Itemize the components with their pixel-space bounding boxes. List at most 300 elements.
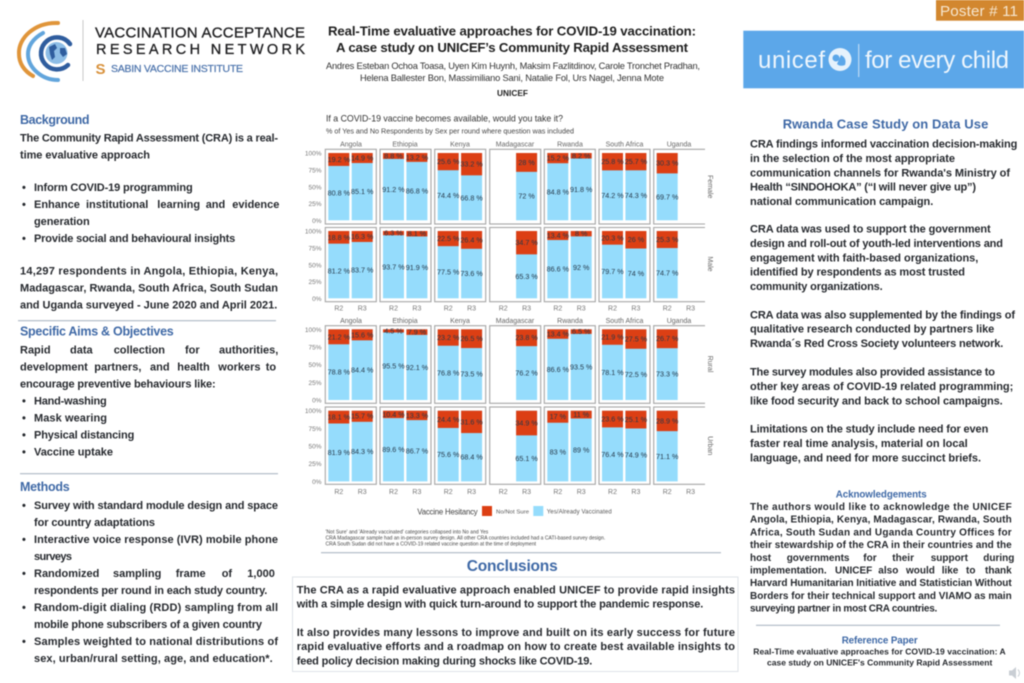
strip label: Rural: Rural bbox=[706, 356, 713, 373]
y axis labels: 0% bbox=[312, 218, 322, 225]
text block: reference citation: Real-Time evaluative approaches for COVID-19 vaccination: A bbox=[753, 647, 1006, 657]
panel: Angola Female bbox=[325, 149, 376, 224]
panel: conclusions bbox=[292, 577, 738, 672]
panel: Uganda Male: 25.3 % bbox=[656, 235, 679, 244]
unicef banner: for every child bbox=[865, 47, 1009, 74]
panel: Kenya Rural: 76.8 % bbox=[437, 368, 460, 377]
panel: Kenya Male: 73.6 % bbox=[460, 269, 483, 278]
list: background bullets bbox=[22, 182, 279, 245]
country strip labels: Kenya bbox=[450, 142, 470, 148]
panel: Uganda Female bbox=[654, 149, 705, 224]
list: background bullets: • bbox=[22, 199, 26, 211]
text block: findings paragraphs: in the selection of the most appropriate bbox=[750, 153, 955, 165]
list: background bullets: and bbox=[206, 199, 225, 211]
panel: Madagascar Male: 34.7 % bbox=[515, 238, 538, 247]
x axis labels: upper chart: R3 bbox=[522, 306, 531, 312]
list: aims bullets: • bbox=[22, 413, 26, 425]
panel: Ethiopia Male bbox=[380, 228, 431, 302]
text block: acknowledgements: thank bbox=[985, 566, 1012, 576]
y axis labels: 50% bbox=[308, 262, 322, 270]
text block: aims intro: authorities, bbox=[219, 345, 278, 357]
panel: conclusions: rapid evaluative efforts and a roadmap on how to create best available insights to bbox=[297, 641, 735, 653]
text block: acknowledgements: Borders for their technical support and VIAMO as main bbox=[750, 591, 1012, 602]
text block: findings paragraphs: qualitative research conducted by partners like bbox=[750, 324, 994, 336]
chart title: If a COVID-19 vaccine becomes available, would you take it? bbox=[326, 114, 563, 124]
y axis labels: 25% bbox=[308, 201, 322, 208]
text block: acknowledgements: would bbox=[905, 566, 935, 576]
text block: aims intro: encourage preventive behaviours like: bbox=[20, 379, 216, 391]
legend: No/Not Sure bbox=[496, 510, 530, 516]
panel: South Africa Male bbox=[599, 228, 650, 302]
logo: Sabin Vaccine Institute: SABIN VACCINE INSTITUTE bbox=[111, 63, 243, 75]
list: background bullets: institutional bbox=[86, 199, 148, 211]
panel: Angola Urban: 18.1 % bbox=[328, 413, 351, 422]
panel: Kenya Female: 74.4 % bbox=[437, 191, 460, 200]
logo wordmark bbox=[95, 24, 305, 58]
y axis labels: 100% bbox=[305, 327, 322, 334]
text block: acknowledgements: also bbox=[878, 566, 898, 576]
logo: Vaccination Acceptance Research Network bbox=[19, 20, 305, 81]
title: Real-Time evaluative approaches for COVID-19 vaccination: bbox=[328, 24, 696, 38]
x axis labels: lower chart: R2 bbox=[608, 489, 617, 496]
list: aims bullets: Mask wearing bbox=[34, 413, 107, 425]
chart subtitle: % of Yes and No Respondents by Sex per round where question was included bbox=[326, 126, 574, 135]
x axis labels: lower chart: R3 bbox=[412, 489, 421, 496]
x axis labels: upper chart: R3 bbox=[358, 306, 367, 312]
panel: Ethiopia Rural: 92.1 % bbox=[406, 363, 429, 372]
panel: Angola Rural: 21.2 % bbox=[328, 332, 351, 341]
y axis labels: 25% bbox=[308, 279, 322, 286]
text block: acknowledgements: host bbox=[750, 553, 772, 564]
logo: Sabin Vaccine Institute: S bbox=[96, 61, 106, 78]
panel: Madagascar Female: 28 % bbox=[518, 158, 535, 167]
chart footnotes: CRA Madagascar sample had an in-person survey design. All other CRA countries included had a CATI-based survey design. bbox=[326, 535, 605, 541]
panel: Angola Male: 16.3 % bbox=[351, 232, 374, 241]
panel: Kenya Urban: 75.6 % bbox=[437, 450, 460, 459]
panel: Ethiopia Male: 8.1 % bbox=[408, 229, 427, 238]
x axis labels: upper chart: R2 bbox=[663, 306, 672, 312]
list: aims bullets: Vaccine uptake bbox=[34, 447, 113, 459]
panel: South Africa Female: 25.8 % bbox=[601, 157, 624, 166]
list: methods bullets: for country adaptations bbox=[34, 517, 155, 529]
x axis labels: upper chart: R3 bbox=[412, 306, 421, 312]
x axis labels: lower chart: R3 bbox=[467, 489, 476, 496]
panel: Rwanda Urban bbox=[544, 407, 595, 484]
y axis labels: 50% bbox=[308, 362, 322, 369]
text block: findings paragraphs: Limitations on the study include need for even bbox=[750, 424, 989, 436]
panel: Ethiopia Female: 8.8 % bbox=[384, 152, 403, 160]
panel: Angola Male bbox=[325, 228, 376, 302]
title: A case study on UNICEF’s Community Rapid Assessment bbox=[336, 40, 689, 55]
panel: Rwanda Male bbox=[544, 228, 595, 302]
x axis labels: upper chart: R2 bbox=[444, 306, 453, 312]
heading: Specific Aims & Objectives: Specific Aims & Objectives bbox=[20, 325, 174, 339]
text block: findings paragraphs: CRA findings informed vaccination decision-making bbox=[750, 139, 1017, 151]
panel: South Africa Rural: 78.1 % bbox=[601, 368, 624, 377]
list: methods bullets: Interactive voice response (IVR) mobile phone bbox=[34, 534, 278, 546]
panel: Kenya Female: 33.2 % bbox=[460, 160, 483, 169]
chart footnotes bbox=[326, 529, 605, 547]
panel: Uganda Urban: 28.9 % bbox=[656, 416, 679, 425]
authors: Andres Esteban Ochoa Toasa, Uyen Kim Huynh, Maksim Fazlitdinov, Carole Tronchet Pradhan, bbox=[326, 61, 700, 71]
panel: Ethiopia Rural: 4.5 % bbox=[384, 326, 403, 335]
text block: acknowledgements: Africa, South Sudan and Uganda Country Offices for bbox=[750, 527, 1012, 538]
panel: Angola Male: 83.7 % bbox=[351, 266, 374, 275]
panel: Madagascar Male: 65.3 % bbox=[515, 272, 538, 281]
x axis labels: lower chart: R2 bbox=[499, 489, 508, 496]
panel: Angola Urban: 84.3 % bbox=[351, 447, 374, 456]
panel: Rwanda Urban: 83 % bbox=[550, 448, 567, 457]
authors: Helena Ballester Bon, Massimiliano Sani, Natalie Fol, Urs Nagel, Jenna Mote bbox=[360, 73, 664, 83]
x axis labels: upper chart bbox=[334, 306, 695, 312]
panel: Kenya Female: 66.8 % bbox=[460, 193, 483, 202]
x axis labels: lower chart: R2 bbox=[553, 489, 562, 496]
text block: aims intro: to bbox=[266, 362, 276, 374]
text block: respondents: and Uganda surveyed - June 2020 and April 2021. bbox=[20, 299, 277, 311]
text block: acknowledgements: Harvard Humanitarian Initiative and Statistician Without bbox=[750, 578, 1012, 589]
panel: Ethiopia Urban: 89.6 % bbox=[382, 445, 405, 454]
panel: South Africa Female bbox=[599, 149, 650, 224]
panel: Uganda Male: 74.7 % bbox=[656, 269, 679, 278]
text block: findings paragraphs: faster real time analysis, material on local bbox=[750, 438, 968, 450]
panel: South Africa Female: 25.7 % bbox=[625, 157, 648, 166]
panel: Uganda Male bbox=[654, 228, 705, 302]
panel: Kenya Male bbox=[435, 228, 486, 302]
icon: concentric arcs and globe bbox=[19, 23, 70, 80]
x axis labels: upper chart: R3 bbox=[686, 306, 695, 312]
panel: South Africa Rural bbox=[599, 326, 650, 403]
x axis labels: lower chart: R3 bbox=[522, 489, 531, 496]
list: background bullets: Inform COVID-19 programming bbox=[34, 182, 193, 194]
panel: South Africa Urban: 76.4 % bbox=[601, 450, 624, 459]
panel: Rwanda case study bbox=[750, 116, 1017, 464]
panel: Uganda Female: 30.3 % bbox=[656, 159, 679, 168]
list: methods bullets: Survey with standard module design and space bbox=[34, 500, 278, 512]
list: background bullets: Provide social and behavioural insights bbox=[34, 233, 235, 245]
list: background bullets: generation bbox=[34, 216, 90, 228]
y axis labels: 25% bbox=[308, 461, 322, 468]
panel: Rwanda Male: 86.6 % bbox=[547, 265, 570, 274]
panel: Angola Female: 85.1 % bbox=[351, 187, 374, 196]
panel: Ethiopia Female bbox=[380, 149, 431, 224]
panel: Ethiopia Male: 93.7 % bbox=[382, 262, 405, 271]
x axis labels: lower chart bbox=[334, 489, 695, 496]
heading: Conclusions: Conclusions bbox=[467, 558, 558, 575]
panel: Rwanda Male: 92 % bbox=[573, 263, 590, 272]
row: Male bbox=[325, 228, 713, 302]
list: aims bullets: Hand-washing bbox=[34, 396, 107, 408]
text block: aims intro: development bbox=[20, 362, 88, 374]
text block: acknowledgements: support bbox=[931, 553, 969, 564]
text block: acknowledgements: like bbox=[942, 566, 959, 576]
panel: Madagascar Female bbox=[490, 149, 541, 224]
panel: Rwanda Male: 8 % bbox=[575, 229, 588, 238]
chart: vaccine hesitancy by sex and setting bbox=[305, 114, 713, 547]
x axis labels: upper chart: R3 bbox=[577, 306, 586, 312]
poster number tag: Poster # 11 bbox=[940, 3, 1018, 20]
text block: acknowledgements: The authors would like to acknowledge the UNICEF bbox=[750, 502, 1012, 513]
section: Specific Aims & Objectives bbox=[20, 325, 278, 459]
country strip labels: Uganda bbox=[667, 142, 691, 148]
panel: conclusions: feed policy decision making during shocks like COVID-19. bbox=[297, 655, 592, 667]
list: background bullets: Enhance bbox=[34, 199, 80, 211]
panel: acknowledgements bbox=[750, 490, 1014, 614]
legend: Vaccine Hesitancy bbox=[417, 507, 478, 516]
panel: Rwanda Female bbox=[544, 149, 595, 224]
legend: Yes/Already Vaccinated bbox=[547, 510, 612, 516]
text block: acknowledgements: Angola, Ethiopia, Kenya, Madagascar, Rwanda, South bbox=[750, 515, 1012, 526]
panel: Rwanda Female: 15.2 % bbox=[547, 154, 570, 163]
text block: acknowledgements bbox=[750, 502, 1014, 614]
panel: Ethiopia Female: 91.2 % bbox=[382, 185, 405, 194]
y axis labels: 75% bbox=[308, 426, 322, 433]
x axis labels: lower chart: R2 bbox=[663, 489, 672, 496]
panel: South Africa Female: 74.2 % bbox=[601, 191, 624, 200]
panel: Ethiopia Urban: 86.7 % bbox=[406, 446, 429, 455]
text block: aims intro: data bbox=[70, 345, 94, 357]
x axis labels: upper chart: R2 bbox=[608, 306, 617, 312]
text block: findings paragraphs: language, and need for more succinct briefs. bbox=[750, 452, 981, 464]
list: methods bullets: mobile phone subscribers of a given country bbox=[34, 619, 263, 631]
y axis labels: 75% bbox=[308, 344, 322, 352]
panel: Kenya Male: 26.4 % bbox=[460, 235, 483, 244]
unicef banner: unicef bbox=[758, 47, 825, 74]
list: methods bullets: • bbox=[22, 534, 26, 546]
panel: South Africa Male: 26 % bbox=[628, 235, 645, 244]
panel: Madagascar Urban: 34.9 % bbox=[515, 418, 538, 428]
text block: aims intro: and bbox=[150, 362, 170, 374]
panel: Kenya Urban: 31.6 % bbox=[460, 417, 483, 426]
affiliation: UNICEF bbox=[497, 88, 528, 98]
x axis labels: lower chart: R3 bbox=[631, 489, 640, 496]
text block: aims intro: workers bbox=[217, 362, 261, 374]
panel: South Africa Rural: 72.5 % bbox=[625, 370, 648, 379]
text block: findings paragraphs: national communication campaign. bbox=[750, 196, 933, 208]
text block: acknowledgements: governments bbox=[787, 553, 850, 564]
panel: Angola Female: 80.8 % bbox=[328, 189, 351, 198]
panel: Kenya Rural: 23.2 % bbox=[437, 333, 460, 342]
list: aims bullets bbox=[22, 396, 134, 459]
panel: South Africa Urban: 74.9 % bbox=[625, 450, 648, 459]
panel: Uganda Urban: 71.1 % bbox=[656, 452, 679, 461]
panel: Uganda Rural: 26.7 % bbox=[656, 334, 679, 343]
panel: Kenya Rural: 26.5 % bbox=[460, 334, 483, 343]
panel: Kenya Male: 22.5 % bbox=[437, 234, 460, 243]
panel: Angola Female: 14.9 % bbox=[351, 154, 374, 162]
y axis labels: 25% bbox=[308, 380, 322, 387]
panel: Rwanda Female: 8.2 % bbox=[572, 151, 591, 160]
panel: Rwanda Female: 84.8 % bbox=[547, 187, 570, 196]
text block: findings paragraphs: Health “SINDOHOKA” (“I will never give up”) bbox=[750, 182, 976, 194]
x axis labels: upper chart: R3 bbox=[467, 306, 476, 312]
panel: Ethiopia Male: 6.3 % bbox=[384, 229, 403, 238]
text block: acknowledgements: UNICEF bbox=[835, 566, 872, 576]
country strip labels: Ethiopia bbox=[392, 318, 418, 325]
country strip labels: Angola bbox=[340, 318, 362, 325]
list: background bullets: learning bbox=[157, 199, 200, 211]
list: aims bullets: • bbox=[22, 430, 26, 442]
text block: reference citation bbox=[753, 647, 1006, 668]
x axis labels: upper chart: R2 bbox=[389, 306, 398, 312]
panel: Madagascar Rural: 23.8 % bbox=[515, 333, 538, 342]
panel: conclusions: The CRA as a rapid evaluative approach enabled UNICEF to provide rapid insights bbox=[297, 584, 735, 596]
text block: respondents bbox=[20, 265, 278, 311]
text block: background intro: The Community Rapid Assessment (CRA) is a real- bbox=[20, 133, 278, 145]
section: Background bbox=[20, 113, 279, 311]
text block: findings paragraphs: community organizations. bbox=[750, 281, 883, 293]
panel: Angola Urban bbox=[325, 407, 376, 484]
list: background bullets: • bbox=[22, 182, 26, 194]
panel: South Africa Female: 74.3 % bbox=[625, 191, 648, 200]
panel: Rwanda Urban: 89 % bbox=[573, 445, 590, 454]
panel: Madagascar Female: 72 % bbox=[518, 192, 535, 201]
text block: acknowledgements: to bbox=[966, 566, 975, 576]
text block: findings paragraphs: identified by respondents as most trusted bbox=[750, 267, 965, 279]
panel: Ethiopia Rural bbox=[380, 326, 431, 403]
text block: findings paragraphs: other key areas of COVID-19 related programming; bbox=[750, 381, 1013, 393]
list: methods bullets: • bbox=[22, 636, 26, 648]
text block: acknowledgements: for bbox=[863, 553, 877, 564]
y axis labels: 50% bbox=[308, 184, 322, 192]
logo: Sabin Vaccine Institute bbox=[96, 61, 243, 78]
y axis labels: 50% bbox=[308, 444, 322, 450]
panel: Rwanda Rural: 86.6 % bbox=[547, 365, 570, 374]
strip label: Urban: Urban bbox=[706, 436, 713, 455]
panel: Kenya Urban: 24.4 % bbox=[437, 415, 460, 424]
text block: acknowledgements: during bbox=[983, 553, 1014, 564]
y axis labels bbox=[305, 150, 322, 486]
list: methods bullets: Samples weighted to national distributions of bbox=[34, 636, 278, 648]
y axis labels: 100% bbox=[305, 150, 322, 158]
country strip labels: Madagascar bbox=[496, 142, 535, 148]
heading: Rwanda Case Study on Data Use: Rwanda Case Study on Data Use bbox=[783, 116, 988, 131]
list: methods bullets: • bbox=[22, 602, 26, 614]
chart footnotes: CRA South Sudan did not have a COVID-19 related vaccine question at the time of deployment bbox=[326, 541, 537, 547]
country strip labels: Rwanda bbox=[557, 142, 583, 148]
y axis labels: 0% bbox=[312, 398, 322, 404]
text block: acknowledgements: surveying partner in most CRA countries. bbox=[750, 604, 938, 614]
authors bbox=[326, 61, 700, 83]
text block: acknowledgements: their bbox=[892, 553, 914, 564]
y axis labels: 75% bbox=[308, 246, 322, 252]
panel: Angola Urban: 15.7 % bbox=[351, 412, 374, 421]
list: aims bullets: • bbox=[22, 447, 26, 459]
panel: Madagascar Male bbox=[490, 228, 541, 302]
country strip labels: Ethiopia bbox=[392, 142, 418, 148]
x axis labels: upper chart: R3 bbox=[631, 306, 640, 312]
list: aims bullets: • bbox=[22, 396, 26, 408]
unicef banner bbox=[743, 31, 1024, 88]
panel: Rwanda Female: 91.8 % bbox=[570, 185, 593, 194]
panel: Angola Rural: 78.8 % bbox=[328, 368, 351, 377]
text block: findings paragraphs: Rwanda´s Red Cross Society volunteers network. bbox=[750, 338, 1003, 350]
list: methods bullets: frame bbox=[176, 568, 206, 580]
panel: Kenya Female bbox=[435, 149, 486, 224]
y axis labels: 75% bbox=[308, 168, 322, 174]
x axis labels: lower chart: R2 bbox=[444, 489, 453, 496]
text block: aims intro: health bbox=[177, 362, 210, 374]
panel: South Africa Male: 20.3 % bbox=[601, 233, 624, 242]
country strip labels: South Africa bbox=[606, 318, 643, 325]
list: methods bullets: surveys bbox=[34, 551, 72, 563]
x axis labels: upper chart: R2 bbox=[553, 306, 562, 312]
panel: Kenya Urban bbox=[435, 407, 486, 484]
panel: Uganda Rural bbox=[654, 326, 705, 403]
country strip labels bbox=[340, 142, 691, 325]
text block: respondents: Madagascar, Rwanda, South Africa, South Sudan bbox=[20, 282, 278, 294]
country strip labels: Madagascar bbox=[496, 318, 535, 325]
panel: Uganda Rural: 73.3 % bbox=[656, 370, 679, 379]
y axis labels: 100% bbox=[305, 408, 322, 415]
text block: findings paragraphs: engagement with faith-based organizations, bbox=[750, 252, 978, 264]
panel: Rwanda Urban: 11 % bbox=[573, 410, 590, 419]
strip label: Male: Male bbox=[706, 256, 713, 272]
text block: findings paragraphs: design and roll-out of youth-led interventions and bbox=[750, 238, 1003, 250]
panel: reference paper bbox=[753, 635, 1006, 668]
list: methods bullets: Randomized bbox=[34, 568, 99, 580]
country strip labels: Uganda bbox=[667, 318, 691, 325]
panel: Kenya Rural bbox=[435, 326, 486, 403]
list: methods bullets: sampling bbox=[113, 568, 161, 580]
text block: respondents: 14,297 respondents in Angola, Ethiopia, Kenya, bbox=[20, 265, 278, 277]
panel: Angola Male: 18.8 % bbox=[328, 233, 351, 242]
panel: South Africa Urban: 23.6 % bbox=[601, 414, 624, 424]
list: methods bullets: respondents per round in each study country. bbox=[34, 585, 267, 597]
panel: South Africa Male: 79.7 % bbox=[601, 267, 624, 276]
y axis labels: 0% bbox=[312, 479, 322, 486]
panel: Ethiopia Urban: 13.3 % bbox=[406, 411, 429, 420]
panel: conclusions: It also provides many lessons to improve and built on its early success for future bbox=[297, 627, 735, 639]
panel: Ethiopia Urban bbox=[380, 407, 431, 484]
panel: South Africa Urban: 25.1 % bbox=[625, 415, 648, 424]
text block: acknowledgements: implementation. bbox=[750, 566, 827, 576]
panel: Madagascar Rural bbox=[490, 326, 541, 403]
panel: Uganda Female: 69.7 % bbox=[656, 192, 679, 201]
panel: Madagascar Rural: 76.2 % bbox=[515, 369, 538, 378]
text block: background intro bbox=[20, 133, 278, 161]
list: background bullets: • bbox=[22, 233, 26, 245]
legend bbox=[417, 506, 612, 516]
heading: Reference Paper: Reference Paper bbox=[842, 635, 918, 646]
text block: aims intro: Rapid bbox=[20, 345, 51, 357]
panel: Ethiopia Female: 13.2 % bbox=[406, 153, 429, 162]
panel: Rwanda Male: 13.4 % bbox=[547, 231, 570, 240]
panel: Ethiopia Male: 91.9 % bbox=[406, 263, 429, 272]
text block: aims intro bbox=[20, 345, 278, 391]
panel: Ethiopia Rural: 7.9 % bbox=[408, 328, 427, 337]
panel: Angola Rural bbox=[325, 326, 376, 403]
panel: Rwanda Rural: 93.5 % bbox=[570, 362, 593, 372]
panel: South Africa Rural: 27.5 % bbox=[625, 334, 648, 344]
y axis labels: 0% bbox=[312, 296, 322, 303]
x axis labels: lower chart: R2 bbox=[389, 489, 398, 496]
strip label: Female: Female bbox=[706, 175, 713, 198]
panel: Rwanda Rural bbox=[544, 326, 595, 403]
list: methods bullets: sex, urban/rural setting, age, and education*. bbox=[34, 653, 273, 665]
text block: findings paragraphs: CRA data was also supplemented by the findings of bbox=[750, 309, 1015, 321]
x axis labels: lower chart: R2 bbox=[334, 489, 343, 496]
panel: conclusions: with a simple design with quick turn-around to support the pandemic response. bbox=[296, 598, 703, 610]
row: Urban bbox=[325, 407, 713, 484]
list: methods bullets bbox=[22, 500, 278, 665]
text block: findings paragraphs: The survey modules also provided assistance to bbox=[750, 367, 995, 379]
list: aims bullets: Physical distancing bbox=[34, 430, 134, 442]
chart footnotes: 'Not Sure' and 'Already vaccinated' categories collapsed into No and Yes bbox=[326, 529, 489, 535]
country strip labels: South Africa bbox=[606, 142, 643, 148]
panel: Ethiopia Urban: 10.4 % bbox=[382, 410, 405, 419]
panel: Kenya Male: 77.5 % bbox=[437, 268, 460, 277]
x axis labels: lower chart: R3 bbox=[358, 489, 367, 496]
